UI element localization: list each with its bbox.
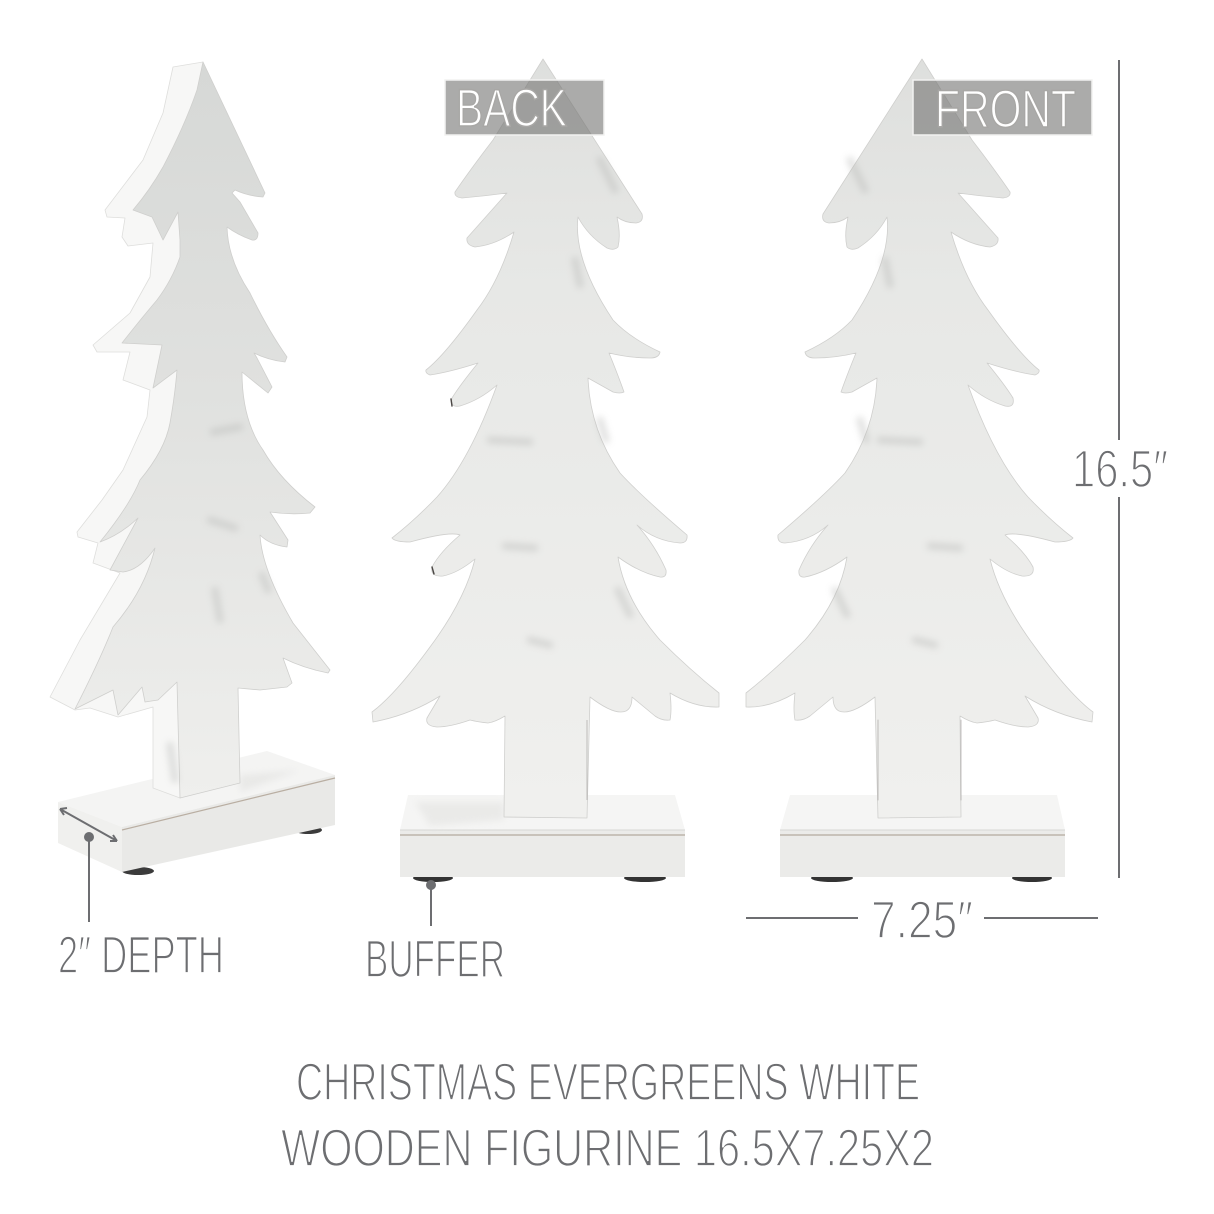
side view tree figurine [50,62,335,875]
back view tree figurine [372,59,719,882]
side tree: weathered marks [170,427,268,780]
back tree: stem edge shading [586,720,588,800]
back tree: base [400,795,685,882]
front tree: base [780,795,1065,882]
side tree: front face [75,62,330,798]
front view tree figurine [746,59,1093,882]
buffer text: BUFFER [365,930,505,989]
buffer callout [365,880,505,989]
back tree: weathered marks [490,160,630,645]
BACK label: BACK [456,79,567,138]
buffer pointer [426,880,436,926]
height dimension 16.5 inches: 16.5″ [1072,440,1168,499]
depth arrow [60,808,117,841]
width dimension 7.25 inches: 7.25″ [871,891,973,950]
depth callout [58,808,224,985]
front tree: weathered marks [835,160,960,645]
product title: WOODEN FIGURINE 16.5X7.25X2 [281,1119,934,1178]
side tree: white edge [50,62,203,798]
product title: CHRISTMAS EVERGREENS WHITE [296,1053,920,1112]
front tree: edge shading [878,720,961,800]
FRONT label: FRONT [935,80,1076,139]
depth pointer [84,832,94,922]
product title [281,1053,934,1178]
back tree: dark chips [432,399,452,574]
back tree: silhouette [372,59,719,818]
front tree: silhouette [746,59,1093,818]
depth text: 2″ DEPTH [58,926,224,985]
side tree: base [58,751,335,875]
